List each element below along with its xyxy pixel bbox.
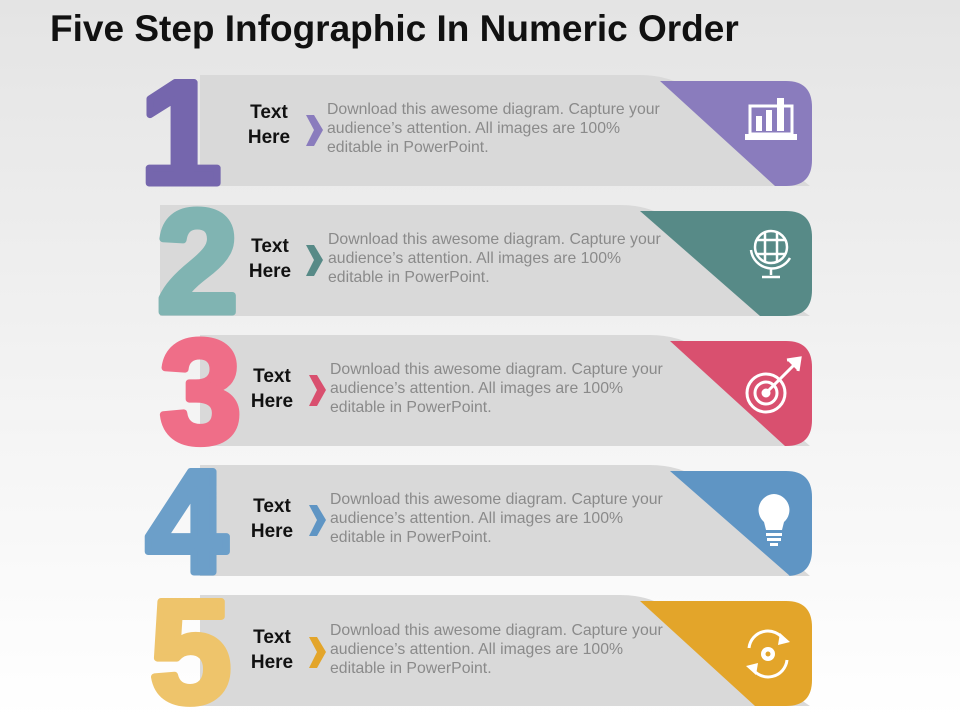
label 4: Text: [253, 496, 291, 517]
step 3: [160, 310, 812, 473]
step 2: [157, 180, 812, 343]
label 1: Here: [248, 127, 290, 148]
step 5: [150, 570, 812, 720]
description 3: editable in PowerPoint.: [330, 399, 492, 416]
label 2: Here: [249, 261, 291, 282]
description 3: audience’s attention. All images are 100%: [330, 380, 623, 397]
tab 3: [670, 341, 812, 446]
description 1: Download this awesome diagram. Capture your: [327, 101, 660, 118]
description 2: editable in PowerPoint.: [328, 269, 490, 286]
description 2: Download this awesome diagram. Capture your: [328, 231, 661, 248]
tab 5: [640, 601, 812, 706]
icon: light bulb: [759, 494, 789, 546]
tab 1: [660, 81, 812, 186]
label 5: Here: [251, 652, 293, 673]
label 2: Text: [251, 236, 289, 257]
step 1: [140, 51, 812, 214]
description 2: audience’s attention. All images are 100%: [328, 250, 621, 267]
label 4: Here: [251, 521, 293, 542]
icon: gear with cycle arrows: [746, 631, 790, 677]
chevron 5: [309, 637, 326, 668]
label 3: Here: [251, 391, 293, 412]
description 5: audience’s attention. All images are 100%: [330, 641, 623, 658]
chevron 2: [306, 245, 323, 276]
title: Five Step Infographic In Numeric Order: [50, 8, 739, 49]
icon: bar chart laptop: [745, 98, 797, 140]
tab 4: [670, 471, 812, 576]
chevron 1: [306, 115, 323, 146]
description 4: Download this awesome diagram. Capture your: [330, 491, 663, 508]
number 3: 3: [160, 310, 241, 473]
number 2: 2: [157, 180, 238, 343]
description 5: editable in PowerPoint.: [330, 660, 492, 677]
label 1: Text: [250, 102, 288, 123]
label 3: Text: [253, 366, 291, 387]
number 1: 1: [140, 51, 221, 214]
description 5: Download this awesome diagram. Capture your: [330, 622, 663, 639]
icon: globe: [751, 231, 790, 277]
label 5: Text: [253, 627, 291, 648]
chevron 3: [309, 375, 326, 406]
tab 2: [640, 211, 812, 316]
number 4: 4: [146, 440, 227, 603]
description 1: editable in PowerPoint.: [327, 139, 489, 156]
description 3: Download this awesome diagram. Capture your: [330, 361, 663, 378]
description 1: audience’s attention. All images are 100%: [327, 120, 620, 137]
chevron 4: [309, 505, 326, 536]
icon: target: [747, 358, 800, 412]
description 4: audience’s attention. All images are 100%: [330, 510, 623, 527]
description 4: editable in PowerPoint.: [330, 529, 492, 546]
step 4: [146, 440, 812, 603]
